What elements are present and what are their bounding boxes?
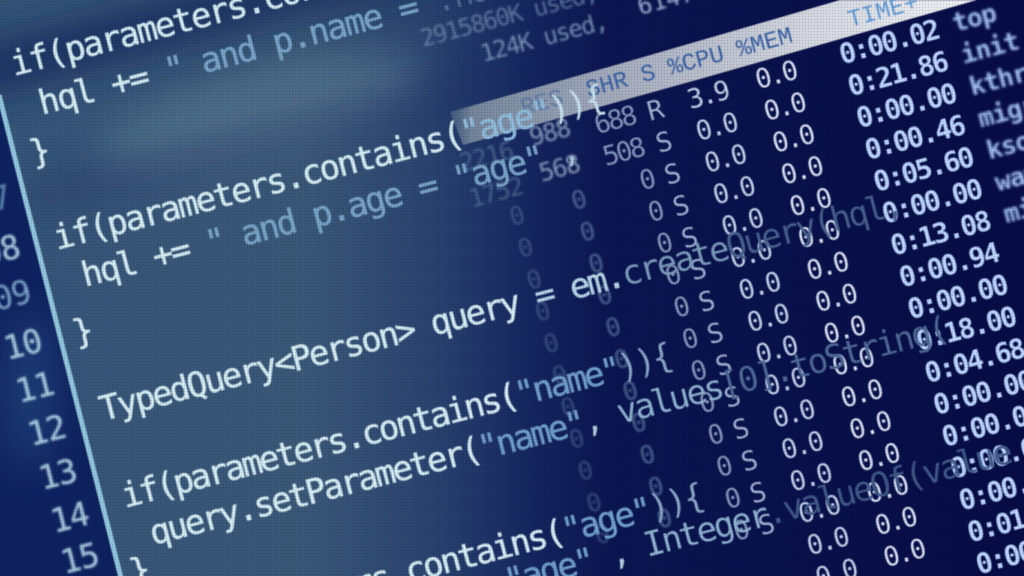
TIME column: 0:05.60 xyxy=(869,140,977,198)
SHR column: 0 xyxy=(679,323,701,356)
header labels: RES xyxy=(518,85,567,123)
CPU column: 0.0 xyxy=(735,266,784,307)
CPU column: 0.0 xyxy=(761,362,810,403)
TIME column: 0:00.02 xyxy=(835,13,942,71)
SHR column: 0 xyxy=(670,291,693,325)
dim memory columns: 0 xyxy=(611,344,632,375)
TIME column: 0:00.00 xyxy=(852,76,960,135)
line numbers: 13 xyxy=(35,451,81,498)
SHR column: 508 xyxy=(599,132,648,173)
SHR column: 0 xyxy=(696,386,718,420)
header labels xyxy=(518,0,922,123)
dim memory columns: 0 xyxy=(568,184,589,216)
SHR column: 0 xyxy=(636,163,658,197)
S state column: S xyxy=(678,221,700,255)
CPU column: 0.0 xyxy=(701,139,750,180)
dim memory columns: 0 xyxy=(549,360,570,391)
header labels: SHR S %CPU %MEM xyxy=(583,24,796,105)
MEM column: 0.0 xyxy=(871,501,920,542)
code line: typed query: TypedQuery<Person> query = em.createQuery(hql, xyxy=(95,184,906,430)
code line: name if: if(parameters.contains("name")){ xyxy=(117,336,675,517)
MEM column: 0.0 xyxy=(794,214,843,255)
S state column: S xyxy=(729,413,752,447)
code line: age hql: hql += " and p.age = "age" , xyxy=(77,129,583,296)
MEM column: 0.0 xyxy=(880,533,929,574)
MEM column: 0.0 xyxy=(769,119,818,160)
dim memory columns: 2216 xyxy=(456,136,516,178)
dim memory columns: 0 xyxy=(574,455,595,487)
dim memory columns: 0 xyxy=(523,264,544,296)
TIME column: 0:04.68 xyxy=(921,331,1024,390)
CPU column: 0.0 xyxy=(752,330,801,371)
dim memory columns: 0 xyxy=(591,519,612,551)
highlighted column header bar xyxy=(450,0,977,145)
SHR column: 0 xyxy=(704,418,727,452)
MEM column: 0.0 xyxy=(846,405,895,446)
S state column: S xyxy=(661,158,683,192)
dim memory columns: 0 xyxy=(619,375,640,407)
code line: set parameter: query.setParameter("name", values[0].toString( xyxy=(145,309,951,554)
S state column: S xyxy=(652,126,675,160)
line numbers: 11 xyxy=(12,364,58,411)
TIME column: 0:13.08 xyxy=(887,204,994,262)
dim memory columns: 0 xyxy=(583,487,604,519)
CPU column: 0.0 xyxy=(709,170,758,211)
dim memory columns: 568 xyxy=(536,149,583,188)
dim memory columns: 0 xyxy=(577,216,598,248)
dim memory columns: 0 xyxy=(532,296,553,327)
TIME column: 0:21.86 xyxy=(844,44,952,103)
MEM column: 0.0 xyxy=(752,55,801,96)
dim memory columns: 0 xyxy=(557,391,578,423)
MEM column: 0.0 xyxy=(803,246,852,287)
MEM column: 0.0 xyxy=(829,342,878,383)
S state column: R xyxy=(644,93,668,128)
dim memory columns: 988 xyxy=(526,113,573,152)
dim memory columns: 0 xyxy=(628,407,649,439)
top status text xyxy=(417,0,697,68)
S state column: S xyxy=(712,349,735,383)
SHR column: 0 xyxy=(713,450,735,484)
CPU column: 0.0 xyxy=(795,489,844,530)
SHR column: 0 xyxy=(644,195,667,229)
MEM column: 0.0 xyxy=(820,310,869,351)
MEM column: 0.0 xyxy=(786,182,835,223)
dim memory columns: 1752 xyxy=(466,171,526,214)
dim memory columns: 0 xyxy=(566,423,587,455)
code brace: } xyxy=(68,310,96,354)
S state column: S xyxy=(755,508,777,542)
S state column: S xyxy=(669,190,692,223)
code line: age if: if(parameters.contains("age")){ xyxy=(49,78,608,259)
line numbers xyxy=(0,177,103,576)
dim memory columns: 0 xyxy=(585,248,606,280)
CPU column: 0.0 xyxy=(769,394,818,435)
CPU column: 0.0 xyxy=(718,202,767,243)
dim memory columns: 0 xyxy=(636,439,657,471)
dim memory columns: 0 xyxy=(594,280,615,311)
dim memory columns: 0 xyxy=(645,471,666,503)
MEM column: 0.0 xyxy=(854,437,903,478)
S state column: S xyxy=(695,285,718,319)
CPU column: 0.0 xyxy=(803,521,852,562)
code brace: } xyxy=(25,130,53,174)
gutter divider line xyxy=(0,95,121,576)
TIME column: 0:18.00 xyxy=(912,299,1020,358)
line numbers: 10 xyxy=(0,321,46,368)
CPU column: 3.9 xyxy=(684,75,733,116)
top status text: 124K used, xyxy=(477,7,610,68)
left gutter xyxy=(0,97,120,576)
TIME column: 0:00.46 xyxy=(861,108,969,166)
SHR column: 0 xyxy=(662,259,684,293)
TIME column: 0:00.94 xyxy=(895,235,1003,294)
dim memory columns: 0 xyxy=(515,232,536,264)
S state column: S xyxy=(686,253,709,287)
CPU column: 0.0 xyxy=(744,298,792,339)
dim memory columns: 0 xyxy=(540,328,561,359)
process name column: init xyxy=(958,26,1022,71)
dim memory columns: 0 xyxy=(602,312,623,343)
CPU column: 0.0 xyxy=(778,425,827,466)
S state column: S xyxy=(746,476,769,510)
CPU column: 0.0 xyxy=(786,457,835,498)
SHR column: 0 xyxy=(653,227,675,261)
MEM column: 0.0 xyxy=(837,374,886,415)
MEM column: 0.0 xyxy=(777,150,826,191)
CPU column: 0.0 xyxy=(692,107,741,148)
dim memory columns xyxy=(456,113,674,551)
MEM column: 0.0 xyxy=(863,469,912,510)
S state column: S xyxy=(704,317,726,351)
TIME column: 0:00.00 xyxy=(878,172,986,230)
CPU column: 0.0 xyxy=(726,234,775,275)
SHR column: 0 xyxy=(730,514,752,548)
dim memory columns: 0 xyxy=(653,503,674,535)
line numbers: 14 xyxy=(47,494,93,541)
MEM column: 0.0 xyxy=(812,278,860,319)
SHR column: 0 xyxy=(687,354,710,388)
TIME column: 0:00.00 xyxy=(904,267,1011,326)
dim memory columns: 0 xyxy=(506,200,527,232)
SHR column: 688 xyxy=(591,100,640,141)
S state column: S xyxy=(721,381,743,415)
line numbers: 12 xyxy=(24,407,70,454)
S state column: S xyxy=(738,445,760,478)
SHR column: 0 xyxy=(721,482,744,516)
MEM column: 0.0 xyxy=(760,87,809,128)
